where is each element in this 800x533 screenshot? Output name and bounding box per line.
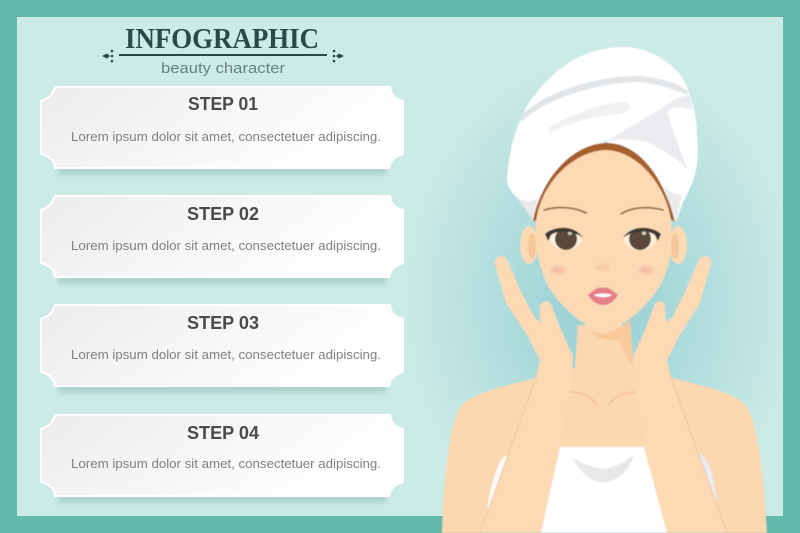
body and shoulders [442,325,767,533]
towel shading [515,76,693,222]
panel: step 02 [41,196,403,291]
step label: STEP 01 [188,93,258,114]
step body text: Lorem ipsum dolor sit amet, consectetuer adipiscing. [71,457,381,471]
towel wrap [540,447,667,533]
subtitle: beauty character [161,61,285,77]
step body text: Lorem ipsum dolor sit amet, consectetuer adipiscing. [71,348,381,362]
collarbones [570,392,637,404]
title rule [119,54,327,56]
title block [102,23,344,77]
cheeks [551,266,653,274]
woman character [442,47,767,533]
heading: infographic: INFOGRAPHIC [125,23,319,55]
panel: step 04 [41,415,403,510]
step label: STEP 02 [187,203,259,224]
panel: step 03 [41,305,403,400]
towel fold [573,454,634,482]
ornament right [333,50,344,62]
step body text: Lorem ipsum dolor sit amet, consectetuer adipiscing. [71,130,381,144]
towel turban [507,47,698,222]
neck shadow [585,320,633,364]
mouth [588,288,618,305]
left arm and hand [480,256,573,533]
face [536,150,672,331]
towel side right [697,452,717,503]
nose [596,264,610,270]
ornament left [102,50,113,62]
step body text: Lorem ipsum dolor sit amet, consectetuer adipiscing. [71,239,381,253]
panel: step 01 [41,87,403,182]
right arm and hand [633,256,727,533]
eyes [545,228,661,250]
step label: STEP 03 [187,312,259,333]
towel side left [487,454,510,510]
hair [533,143,675,222]
ears [520,226,687,264]
eyebrows [544,208,663,214]
step label: STEP 04 [187,422,260,443]
